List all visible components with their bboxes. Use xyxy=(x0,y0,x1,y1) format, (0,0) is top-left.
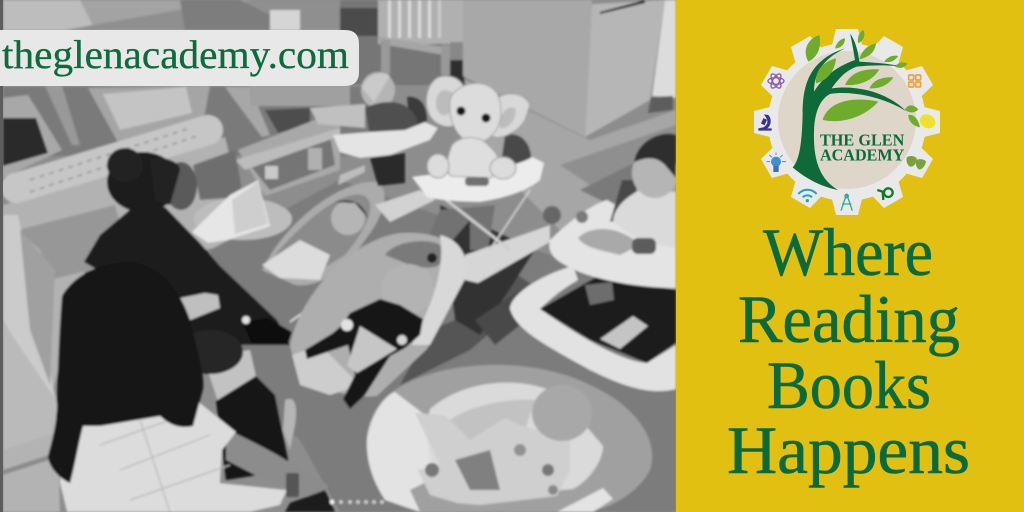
headline: Reading xyxy=(738,281,960,357)
icon: atom xyxy=(768,72,784,90)
tree trunk xyxy=(793,33,907,190)
icon: theatre masks xyxy=(906,156,926,169)
tree leaves xyxy=(806,30,920,127)
elephant walker tray xyxy=(412,134,544,202)
carousel dots xyxy=(330,500,384,504)
website label pill: theglenacademy.com xyxy=(2,32,349,77)
rug xyxy=(210,180,676,512)
panel: grayscale classroom photo xyxy=(0,0,678,512)
headline: Books xyxy=(767,347,931,423)
open book and pillow xyxy=(192,180,292,243)
headline: Where xyxy=(763,214,933,290)
icon: compass xyxy=(841,194,852,211)
icon: palette xyxy=(917,112,938,131)
logo name: ACADEMY xyxy=(820,145,904,164)
icon: light bulb xyxy=(767,153,786,172)
headline: Happens xyxy=(727,412,970,488)
logo name xyxy=(820,131,904,164)
round bouncer with baby in foreground xyxy=(367,365,652,512)
cabinet xyxy=(463,0,676,137)
second walker frame and legs xyxy=(375,190,561,283)
toy shelf xyxy=(235,104,365,196)
icon: orange grid xyxy=(909,75,921,87)
woman reading, dark scrubs xyxy=(84,148,292,374)
woman in quilted jacket xyxy=(48,262,335,512)
left edge strip xyxy=(0,0,3,512)
icon: gear and wrench xyxy=(877,188,893,200)
panel: yellow background xyxy=(676,0,1024,512)
elephant toy xyxy=(426,76,530,186)
room background shelves and cribs xyxy=(3,0,383,178)
wood floor right xyxy=(465,80,676,230)
gear teeth xyxy=(754,29,940,215)
reclining baby in patterned bouncer xyxy=(290,233,466,409)
baby walker with toddler, left xyxy=(333,72,438,186)
logo: The Glen Academy gear xyxy=(754,29,940,215)
icon: microscope xyxy=(758,114,772,131)
logo name: THE GLEN xyxy=(820,131,904,150)
walker with baby, right xyxy=(510,134,678,391)
bouncer seat with sleeping baby xyxy=(262,182,385,322)
long cushion and shelf xyxy=(3,128,260,512)
middle crib xyxy=(340,0,465,85)
icon: wifi xyxy=(798,190,817,201)
gear inner disc xyxy=(778,51,916,189)
headline xyxy=(727,214,970,488)
